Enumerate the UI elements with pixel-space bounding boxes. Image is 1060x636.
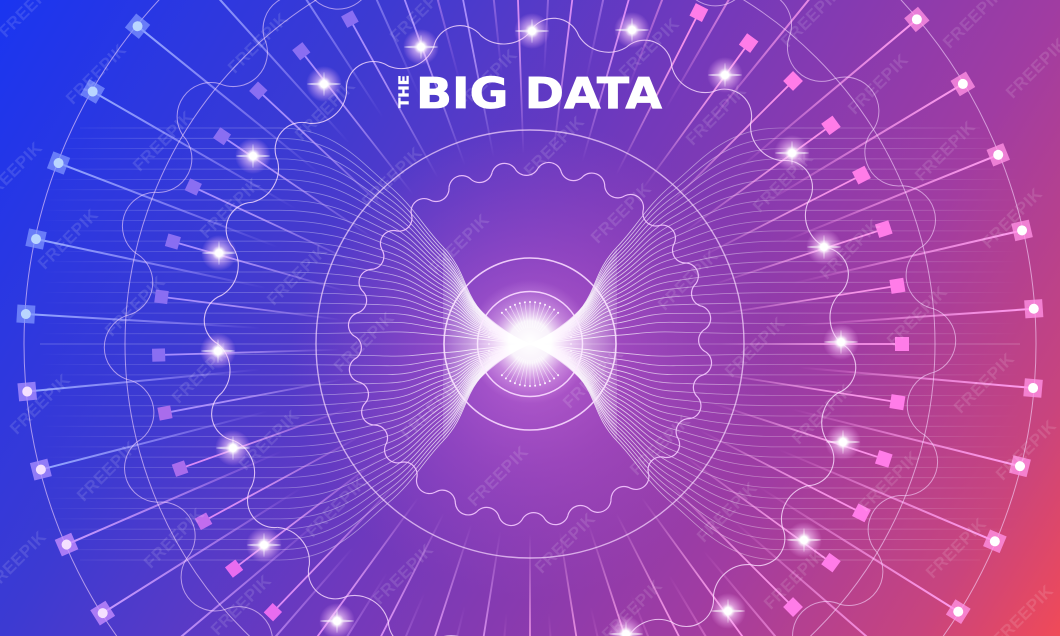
- watermark: FREEPIK: [855, 447, 923, 515]
- watermark: FREEPIK: [615, 14, 683, 82]
- watermark: FREEPIK: [721, 313, 789, 381]
- inner square nodes: left side: [152, 10, 359, 621]
- outer nodes: left side: [16, 14, 150, 626]
- watermark: FREEPIK: [6, 370, 74, 438]
- watermark: FREEPIK: [587, 179, 655, 247]
- watermark: FREEPIK: [196, 174, 264, 242]
- watermark: FREEPIK: [654, 246, 722, 314]
- watermark: FREEPIK: [816, 215, 884, 283]
- watermark: FREEPIK: [129, 107, 197, 175]
- watermark: FREEPIK: [978, 184, 1046, 252]
- watermark: FREEPIK: [101, 272, 169, 340]
- watermark: FREEPIK: [531, 509, 599, 577]
- watermark: FREEPIK: [992, 416, 1060, 484]
- watermark: FREEPIK: [950, 349, 1018, 417]
- watermark: FREEPIK: [73, 437, 141, 505]
- glowing flares along the wavy ring: [200, 12, 861, 636]
- watermark: FREEPIK: [520, 112, 588, 180]
- central glow: [468, 280, 592, 404]
- watermark: FREEPIK: [330, 308, 398, 376]
- watermark: FREEPIK: [397, 375, 465, 443]
- watermark: FREEPIK: [140, 504, 208, 572]
- watermark: FREEPIK: [358, 143, 426, 211]
- watermark: FREEPIK: [369, 540, 437, 608]
- watermark: FREEPIK: [168, 339, 236, 407]
- wavy ring: inner: [342, 156, 718, 532]
- inner square nodes: right side: [689, 3, 909, 617]
- watermark: FREEPIK: [760, 545, 828, 613]
- watermark: FREEPIK: [626, 411, 694, 479]
- watermark: FREEPIK: [425, 210, 493, 278]
- watermark: FREEPIK: [749, 148, 817, 216]
- watermark: FREEPIK: [291, 76, 359, 144]
- watermark: FREEPIK: [911, 117, 979, 185]
- watermark: FREEPIK: [883, 282, 951, 350]
- watermark: FREEPIK: [235, 406, 303, 474]
- watermark: FREEPIK: [224, 9, 292, 77]
- watermark: FREEPIK: [464, 442, 532, 510]
- watermark: FREEPIK: [922, 514, 990, 582]
- outer nodes: right side: [904, 7, 1043, 624]
- watermark: FREEPIK: [302, 473, 370, 541]
- watermark: FREEPIK: [263, 241, 331, 309]
- watermark: FREEPIK: [559, 344, 627, 412]
- wavy ring: through the flares: [190, 4, 870, 636]
- watermark: FREEPIK: [693, 478, 761, 546]
- title: BIG DATA: [416, 69, 663, 119]
- watermark: FREEPIK: [788, 380, 856, 448]
- line fan converging on the centre: [40, 128, 1020, 560]
- radial data lines: inner ring: [158, 0, 902, 636]
- title: THE: [396, 75, 412, 108]
- watermark: FREEPIK: [453, 45, 521, 113]
- watermark: FREEPIK: [34, 205, 102, 273]
- watermark: FREEPIK: [62, 40, 130, 108]
- watermark: FREEPIK: [844, 50, 912, 118]
- central hourglass burst: [443, 247, 617, 441]
- watermark: FREEPIK: [682, 81, 750, 149]
